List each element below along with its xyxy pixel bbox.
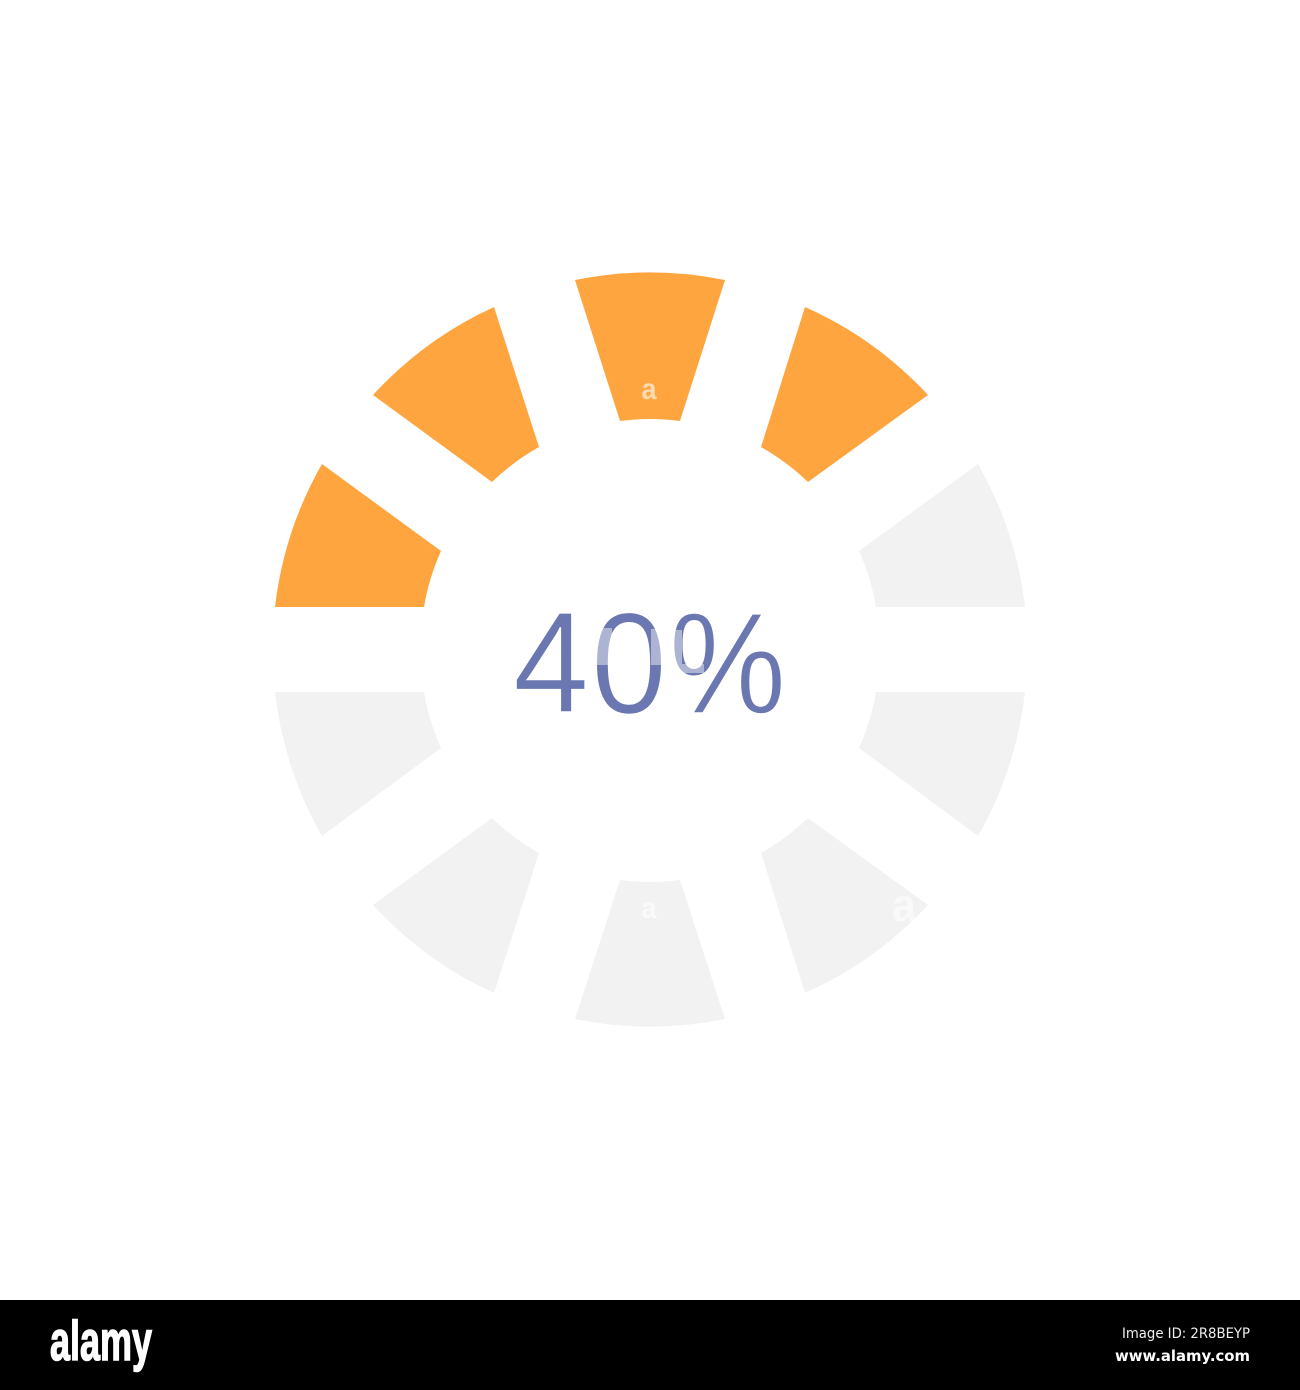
watermark over percentage label [596, 628, 704, 673]
empty segments: remaining 60 percent [275, 464, 1025, 1027]
watermark letters on segments: a [642, 892, 657, 925]
watermark letters on segments [642, 373, 916, 931]
progress ring [275, 272, 1025, 1027]
footer bar [0, 1300, 1300, 1390]
watermark letters on segments: a [892, 879, 916, 931]
percentage label: 0 [591, 583, 667, 744]
percentage label: 4 [513, 582, 589, 743]
image id: Image ID: 2R8BEYP [1122, 1326, 1250, 1342]
filled segments: 40 percent [275, 272, 928, 607]
watermark letters on segments: a [642, 373, 657, 406]
footer logo: alamy [50, 1309, 152, 1372]
percentage label [513, 582, 786, 744]
website: www.alamy.com [1115, 1347, 1250, 1365]
percentage label: % [669, 583, 786, 744]
